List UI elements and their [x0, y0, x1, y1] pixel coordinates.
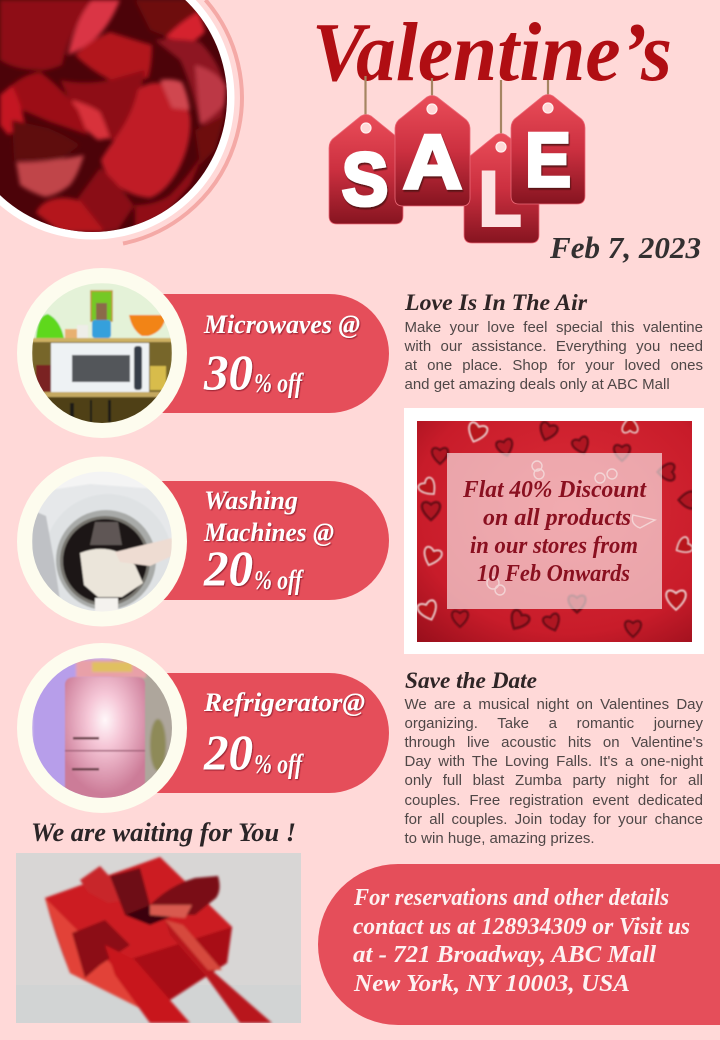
heading: We are waiting for You: We are waiting for You !	[31, 818, 296, 847]
ring	[17, 456, 187, 626]
heading: Save the Date: Save the Date	[405, 668, 537, 693]
SALE hanging tags	[329, 76, 585, 243]
offer text	[462, 477, 647, 587]
label	[203, 486, 334, 547]
pill	[100, 481, 389, 600]
decorative pink arc around the rose circle	[123, 0, 242, 244]
text block: save the date body: couples. Free registration event dedicated	[404, 792, 703, 809]
text block: save the date body	[404, 696, 703, 847]
text block: save the date body: to win huge, amazing prizes.	[404, 830, 595, 847]
text block: save the date body: organizing. Take a romantic journey	[404, 715, 703, 732]
discount: % off	[254, 565, 304, 595]
text block: love is in the air body: and get amazing deals only at ABC Mall	[404, 376, 670, 393]
photo: red gift box	[16, 853, 301, 1025]
label: Machines @	[203, 518, 334, 547]
text block: love is in the air body: at one place. Shop for your loved ones	[404, 357, 703, 374]
hearts photo	[416, 417, 695, 642]
ring	[17, 643, 187, 813]
discount	[203, 724, 304, 780]
discount: 30	[203, 344, 253, 400]
title: Valentine's: Valentine’s	[312, 6, 672, 99]
panel: refrigerator offer	[17, 643, 389, 813]
heading: Love Is In The Air: Love Is In The Air	[404, 290, 588, 315]
icon: microwave photo	[32, 283, 172, 426]
icon: refrigerator photo	[32, 658, 174, 800]
offer text: Flat 40% Discount	[462, 477, 647, 503]
translucent panel	[447, 453, 662, 609]
tag A	[395, 96, 470, 206]
offer text: in our stores from	[470, 533, 638, 559]
tag L: L	[479, 157, 521, 242]
label: Refrigerator@	[203, 688, 365, 717]
text block: love is in the air body: with our assistance. Everything you need	[404, 338, 703, 355]
pill	[100, 673, 389, 793]
discount: % off	[254, 749, 304, 779]
discount: % off	[254, 368, 304, 398]
text block: save the date body: only full blast Zumba party night for all	[404, 772, 703, 789]
pill	[100, 294, 389, 413]
label: Washing	[204, 486, 298, 515]
discount	[203, 540, 304, 596]
text block: save the date body: through live acoustic hits on Valentine's	[404, 734, 703, 751]
tag E	[511, 94, 585, 204]
ring	[17, 268, 187, 438]
text block: save the date body: Day with The Loving Falls. It's a one-night	[404, 753, 703, 770]
panel: microwaves offer	[17, 268, 389, 438]
text block: love is in the air body	[404, 318, 703, 393]
tag A: A	[403, 120, 462, 205]
contact text	[353, 885, 690, 997]
discount: 20	[203, 540, 253, 596]
panel: contact details	[318, 864, 720, 1025]
rose petals circular photo	[0, 0, 240, 240]
discount	[203, 344, 304, 400]
tag L	[464, 134, 539, 243]
text block: save the date body: for all couples. Join today for your chance	[404, 811, 703, 828]
offer text: 10 Feb Onwards	[477, 561, 630, 587]
date: Feb 7, 2023	[549, 230, 701, 265]
contact text: at - 721 Broadway, ABC Mall	[353, 942, 656, 968]
tag S	[329, 114, 403, 224]
strings	[366, 76, 548, 143]
panel: flat 40% discount card	[404, 408, 704, 654]
white frame	[404, 408, 704, 654]
offer text: on all products	[483, 505, 631, 531]
contact text: New York, NY 10003, USA	[353, 971, 630, 997]
text block: love is in the air body: Make your love feel special this valentine	[404, 318, 703, 336]
label: Microwaves @	[203, 310, 360, 339]
pill	[318, 864, 720, 1025]
tag S: S	[342, 138, 388, 221]
icon: washing machine photo	[32, 471, 172, 622]
discount: 20	[203, 724, 253, 780]
panel: washing machines offer	[17, 456, 389, 626]
contact text: contact us at 128934309 or Visit us	[353, 914, 690, 940]
tag E: E	[525, 118, 571, 203]
text block: save the date body: We are a musical night on Valentines Day	[404, 696, 703, 712]
contact text: For reservations and other details	[353, 885, 669, 911]
